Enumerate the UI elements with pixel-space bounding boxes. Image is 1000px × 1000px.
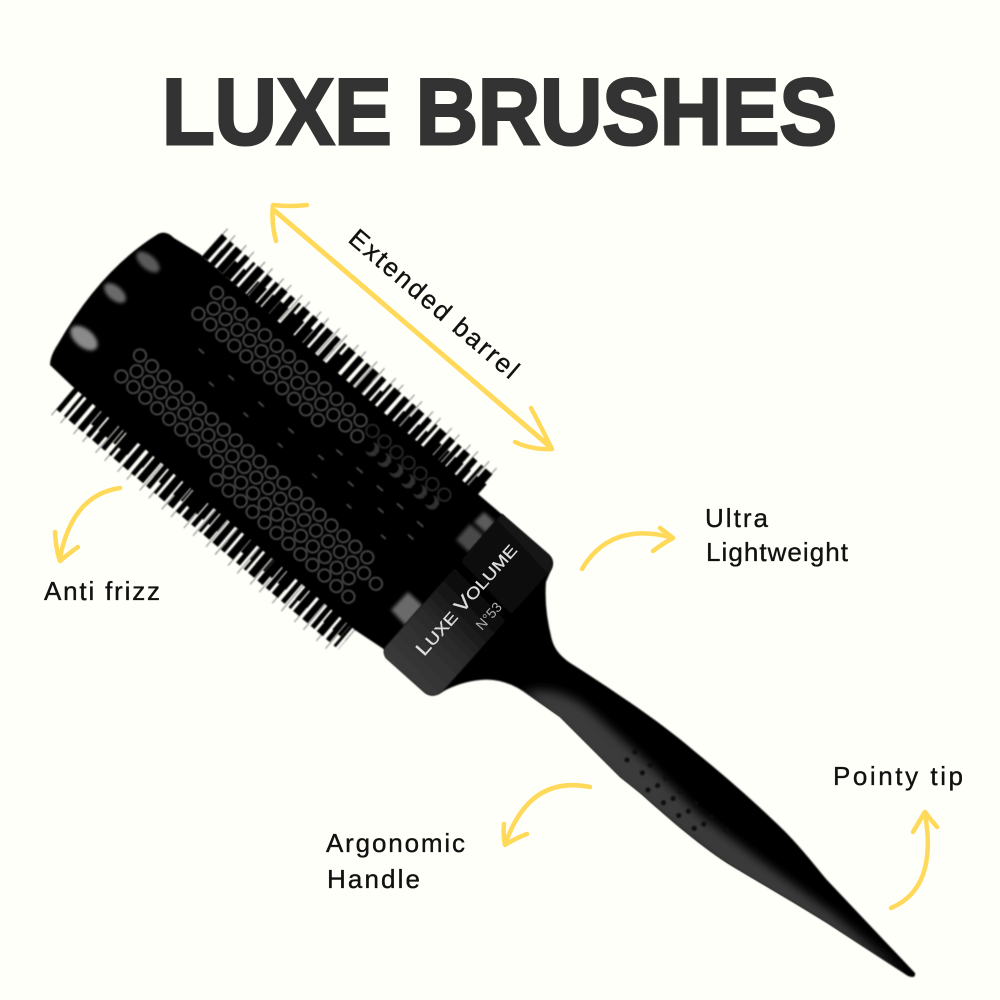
collar brand text: LUXE VOLUME — [412, 540, 522, 660]
ferrule highlights — [391, 512, 495, 626]
arrow: argonomic handle — [504, 785, 590, 845]
barrel end cap highlights — [66, 248, 163, 355]
label: argonomic handle: Argonomic — [326, 828, 465, 858]
arrow: anti frizz — [55, 488, 120, 561]
label: ultra lightweight: Lightweight — [706, 537, 849, 567]
brush — [50, 233, 915, 977]
barrel — [50, 233, 505, 652]
barrel vent holes — [112, 282, 452, 606]
collar — [384, 514, 553, 696]
label: ultra lightweight — [705, 503, 849, 567]
label: ultra lightweight: Ultra — [705, 503, 769, 533]
bristles: bottom fringe — [62, 393, 352, 642]
bristles: top fringe — [208, 241, 488, 492]
label: pointy tip: Pointy tip — [833, 761, 963, 791]
arrow: extended barrel — [272, 205, 552, 449]
handle grip dots — [627, 752, 727, 836]
label: anti frizz: Anti frizz — [44, 576, 160, 606]
label: extended barrel: Extended barrel — [343, 223, 525, 385]
handle — [384, 514, 915, 977]
arrow: ultra lightweight — [582, 528, 673, 569]
label: argonomic handle: Handle — [327, 864, 420, 894]
label: argonomic handle — [326, 828, 465, 894]
barrel centre flecks — [187, 337, 427, 555]
handle grey band — [525, 690, 905, 975]
arrow: pointy tip — [891, 812, 937, 908]
collar brand text: N°53 — [472, 599, 505, 633]
title: LUXE BRUSHES — [162, 59, 837, 164]
